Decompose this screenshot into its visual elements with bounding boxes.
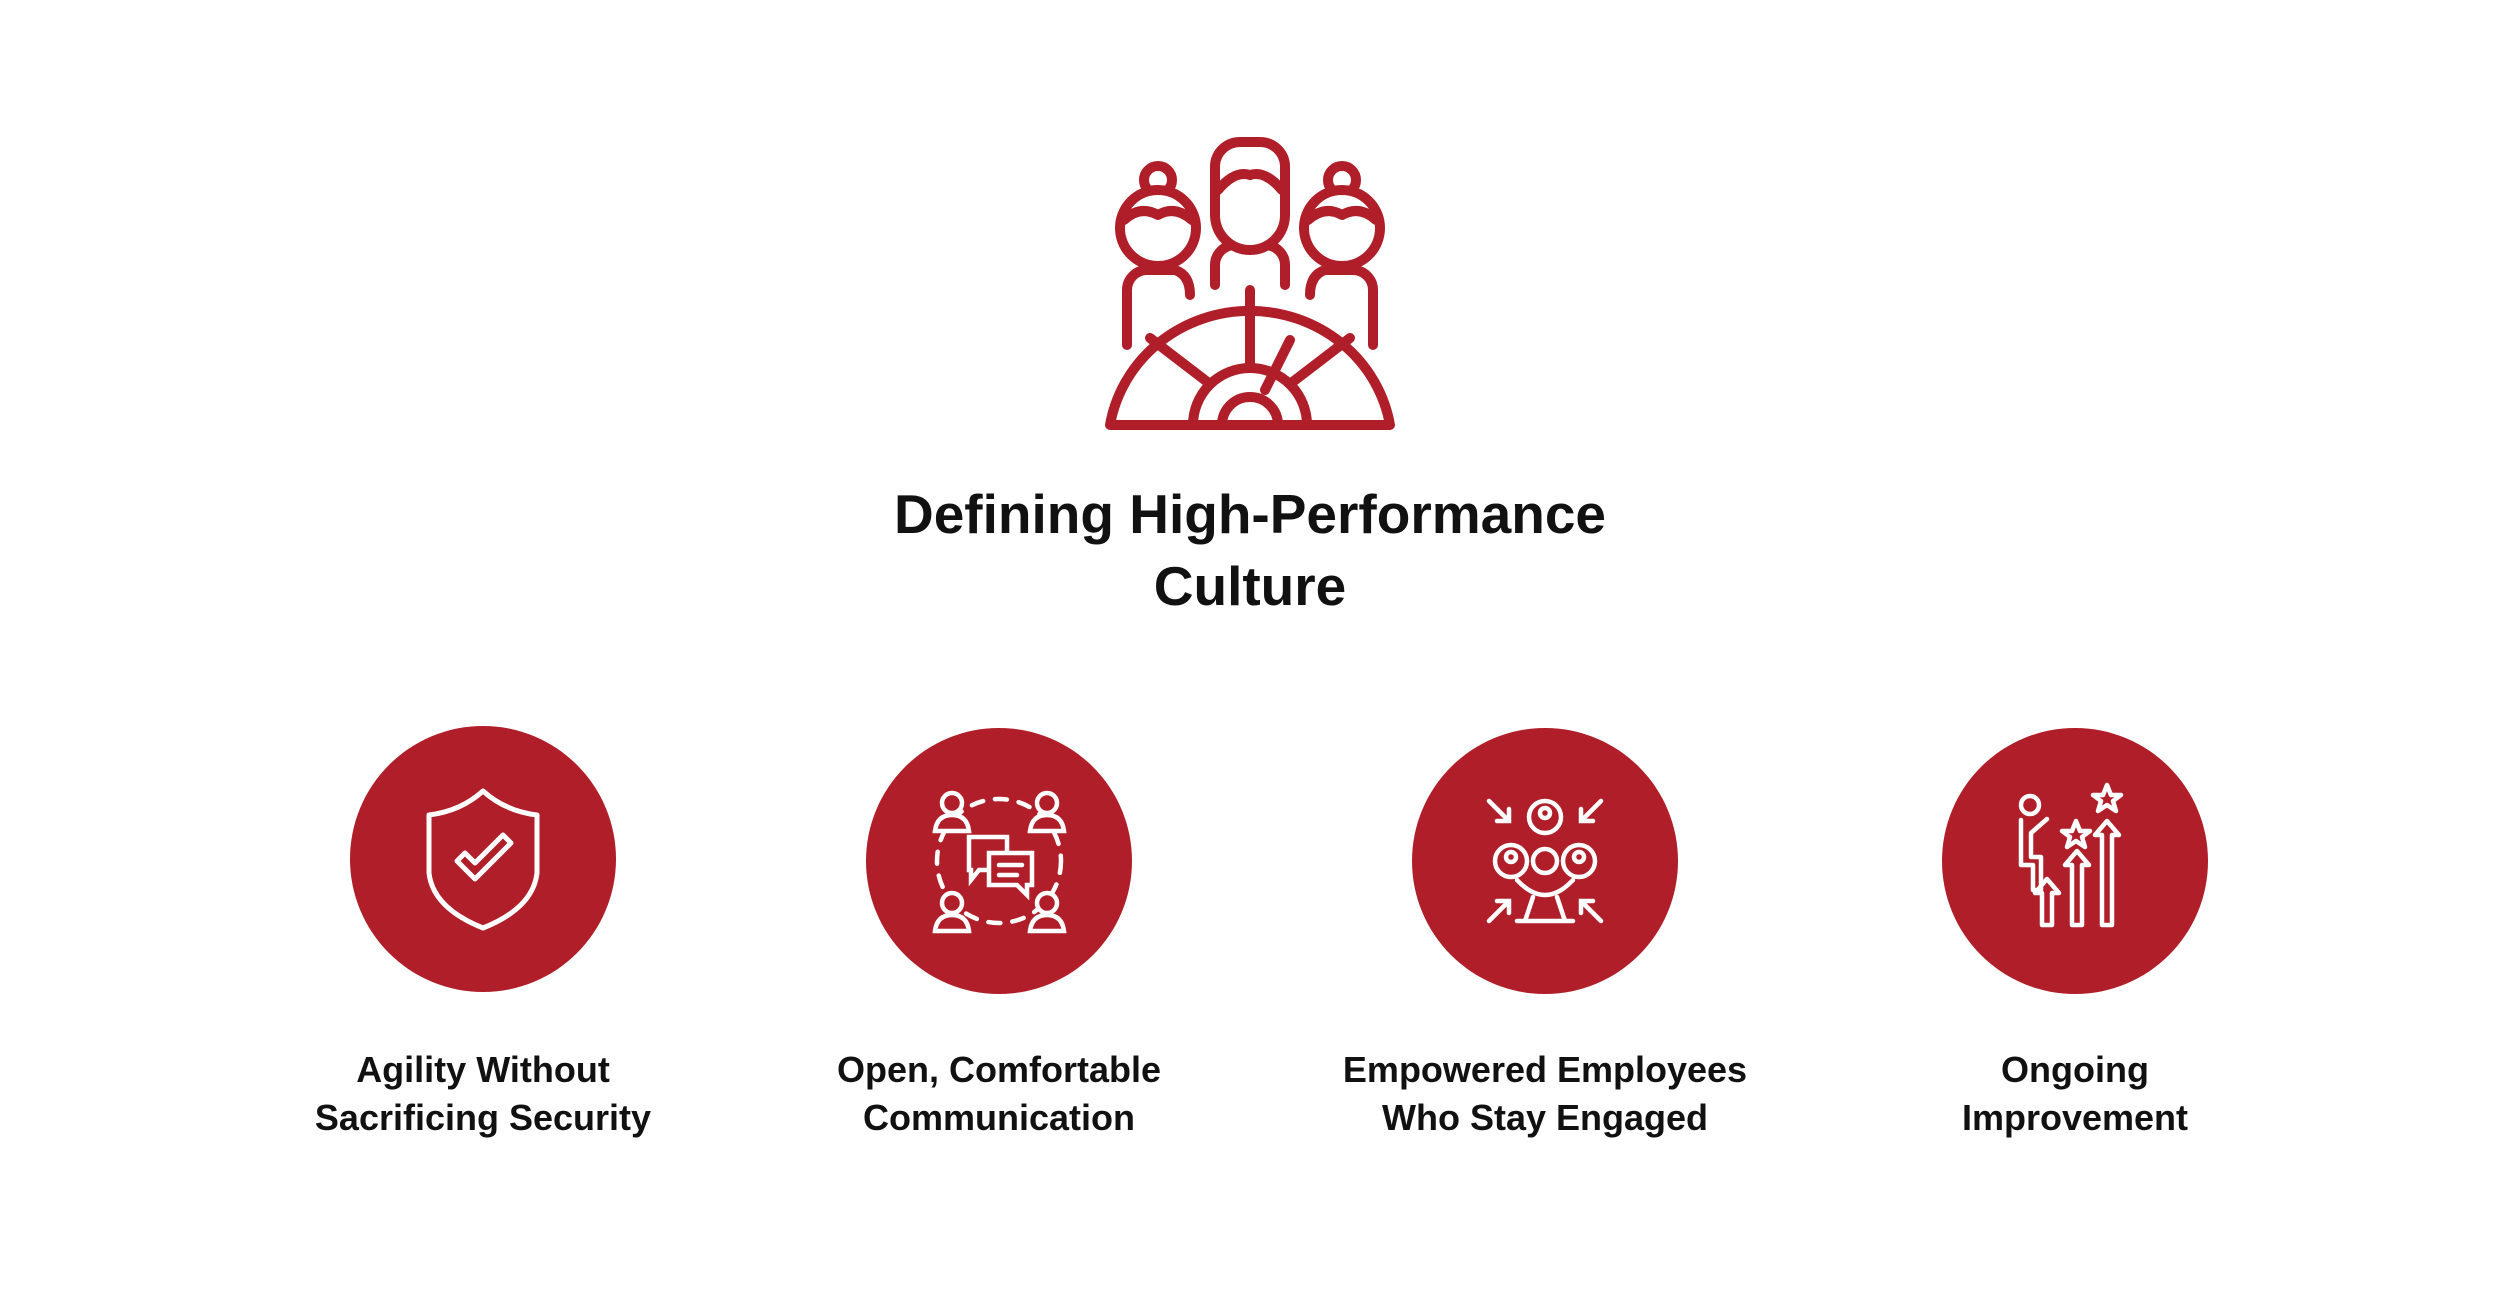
label: Who Stay Engaged bbox=[1382, 1097, 1708, 1138]
label bbox=[1962, 1049, 2188, 1138]
panel: communication bbox=[837, 728, 1161, 1138]
icon: shield circle bbox=[350, 726, 616, 992]
icon: engaged people circle bbox=[1412, 728, 1678, 994]
title: Culture bbox=[1154, 555, 1346, 617]
icon: communication circle bbox=[866, 728, 1132, 994]
label: Communication bbox=[863, 1097, 1135, 1138]
label bbox=[837, 1049, 1161, 1138]
label: Sacrificing Security bbox=[315, 1097, 651, 1138]
label bbox=[1343, 1049, 1747, 1138]
panel: empowered bbox=[1343, 728, 1747, 1138]
label: Improvement bbox=[1962, 1097, 2188, 1138]
title bbox=[894, 483, 1606, 617]
label: Ongoing bbox=[2001, 1049, 2149, 1090]
icon: growth circle bbox=[1942, 728, 2208, 994]
panel: improvement bbox=[1942, 728, 2208, 1138]
panel: agility bbox=[315, 726, 651, 1138]
label: Empowered Employees bbox=[1343, 1049, 1747, 1090]
label: Agility Without bbox=[356, 1049, 610, 1090]
label bbox=[315, 1049, 651, 1138]
title: Defining High-Performance bbox=[894, 483, 1606, 545]
label: Open, Comfortable bbox=[837, 1049, 1161, 1090]
